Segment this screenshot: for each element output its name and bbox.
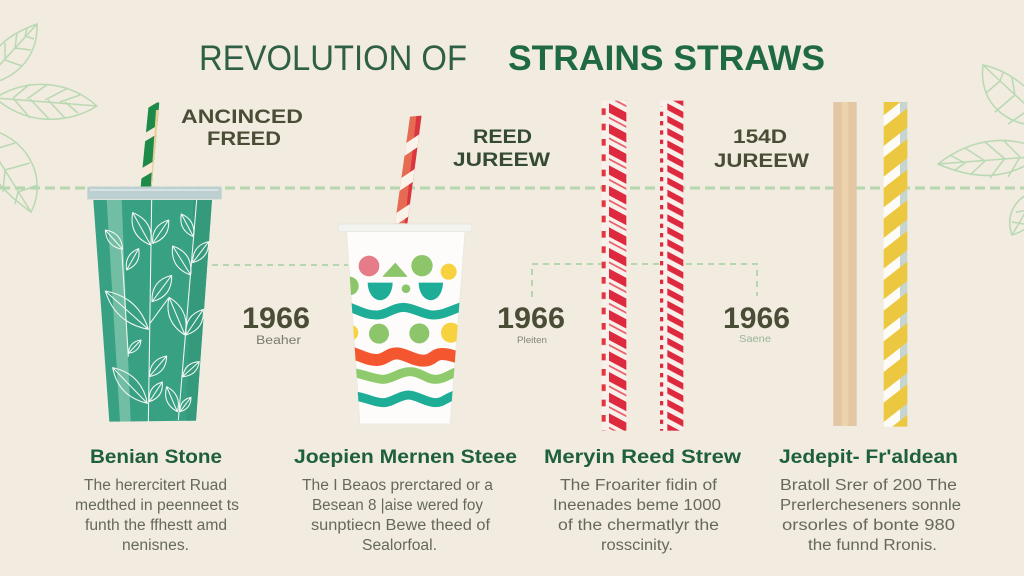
cup lid xyxy=(87,187,222,199)
year 3: 1966 xyxy=(723,302,790,335)
column 4 text xyxy=(779,447,961,554)
column 3 text: Meryin Reed Strew xyxy=(544,447,741,468)
column 2 text: sunptiecn Bewe theed of xyxy=(311,517,491,534)
paper straws xyxy=(602,101,907,431)
column 1 text: nenisnes. xyxy=(122,537,189,554)
era label 3: JUREEW xyxy=(714,151,809,172)
title: STRAINS STRAWS xyxy=(508,39,825,78)
column 2 text xyxy=(294,447,517,554)
leaves: right xyxy=(938,65,1024,235)
leaf pattern xyxy=(105,200,209,422)
column 1 text xyxy=(75,447,239,554)
cup body xyxy=(347,232,465,424)
era label 2: JUREEW xyxy=(453,150,550,171)
column 4 text: orsorles of bonte 980 xyxy=(782,517,955,534)
column 1 text: funth the ffhestt amd xyxy=(85,517,227,534)
year 2: Pleiten xyxy=(517,335,547,346)
column 1 text: medthed in peenneet ts xyxy=(75,497,239,514)
column 3 text: Ineenades beme 1000 xyxy=(553,497,721,514)
column 4 text: Jedepit- Fr'aldean xyxy=(779,447,958,468)
cup body xyxy=(93,200,212,422)
column 2 text: Joepien Mernen Steee xyxy=(294,447,517,468)
connector dashes xyxy=(212,264,757,297)
column 2 text: The I Beaos prerctared or a xyxy=(302,477,493,494)
column 3 text: The Froariter fidin of xyxy=(560,477,718,494)
title: REVOLUTION OF xyxy=(199,39,467,78)
red straw B xyxy=(660,101,683,431)
column 3 text: of the chermatlyr the xyxy=(558,517,719,534)
era label 1: ANCINCED xyxy=(181,107,303,128)
cup lid xyxy=(338,224,472,232)
timeline dashed line xyxy=(0,186,1024,190)
yellow straw D xyxy=(884,102,907,427)
cup 2: white pattern cup with straw xyxy=(338,113,472,424)
era label 2: REED xyxy=(473,127,532,148)
column 3 text xyxy=(544,447,741,554)
column 4 text: Prerlercheseners sonnle xyxy=(780,497,961,514)
column 4 text: the funnd Rronis. xyxy=(808,537,937,554)
column 3 text: rosscinity. xyxy=(601,537,673,554)
cup 1: green leaf cup with straw xyxy=(87,99,222,422)
red straw A xyxy=(602,101,626,431)
column 2 text: Besean 8 |aise wered foy xyxy=(312,497,483,514)
column 4 text: Bratoll Srer of 200 The xyxy=(780,477,957,494)
cup highlight bands xyxy=(107,200,212,422)
era label 1: FREED xyxy=(207,129,281,150)
green striped straw xyxy=(140,102,160,186)
column 1 text: Benian Stone xyxy=(90,447,222,468)
era label 3: 154D xyxy=(733,127,787,148)
pattern shapes xyxy=(340,255,462,403)
title xyxy=(199,39,825,78)
column 1 text: The herercitert Ruad xyxy=(84,477,227,494)
red striped straw xyxy=(395,116,422,224)
era label 1 xyxy=(181,107,303,150)
tan straw C xyxy=(833,102,857,426)
column 2 text: Sealorfoal. xyxy=(362,537,437,554)
era label 2 xyxy=(453,127,550,171)
year 1: Beaher xyxy=(256,335,301,347)
year 1: 1966 xyxy=(242,302,310,335)
year 3: Saene xyxy=(739,333,771,345)
era label 3 xyxy=(714,127,809,172)
leaves: top left xyxy=(0,24,97,212)
year 2: 1966 xyxy=(497,302,565,335)
